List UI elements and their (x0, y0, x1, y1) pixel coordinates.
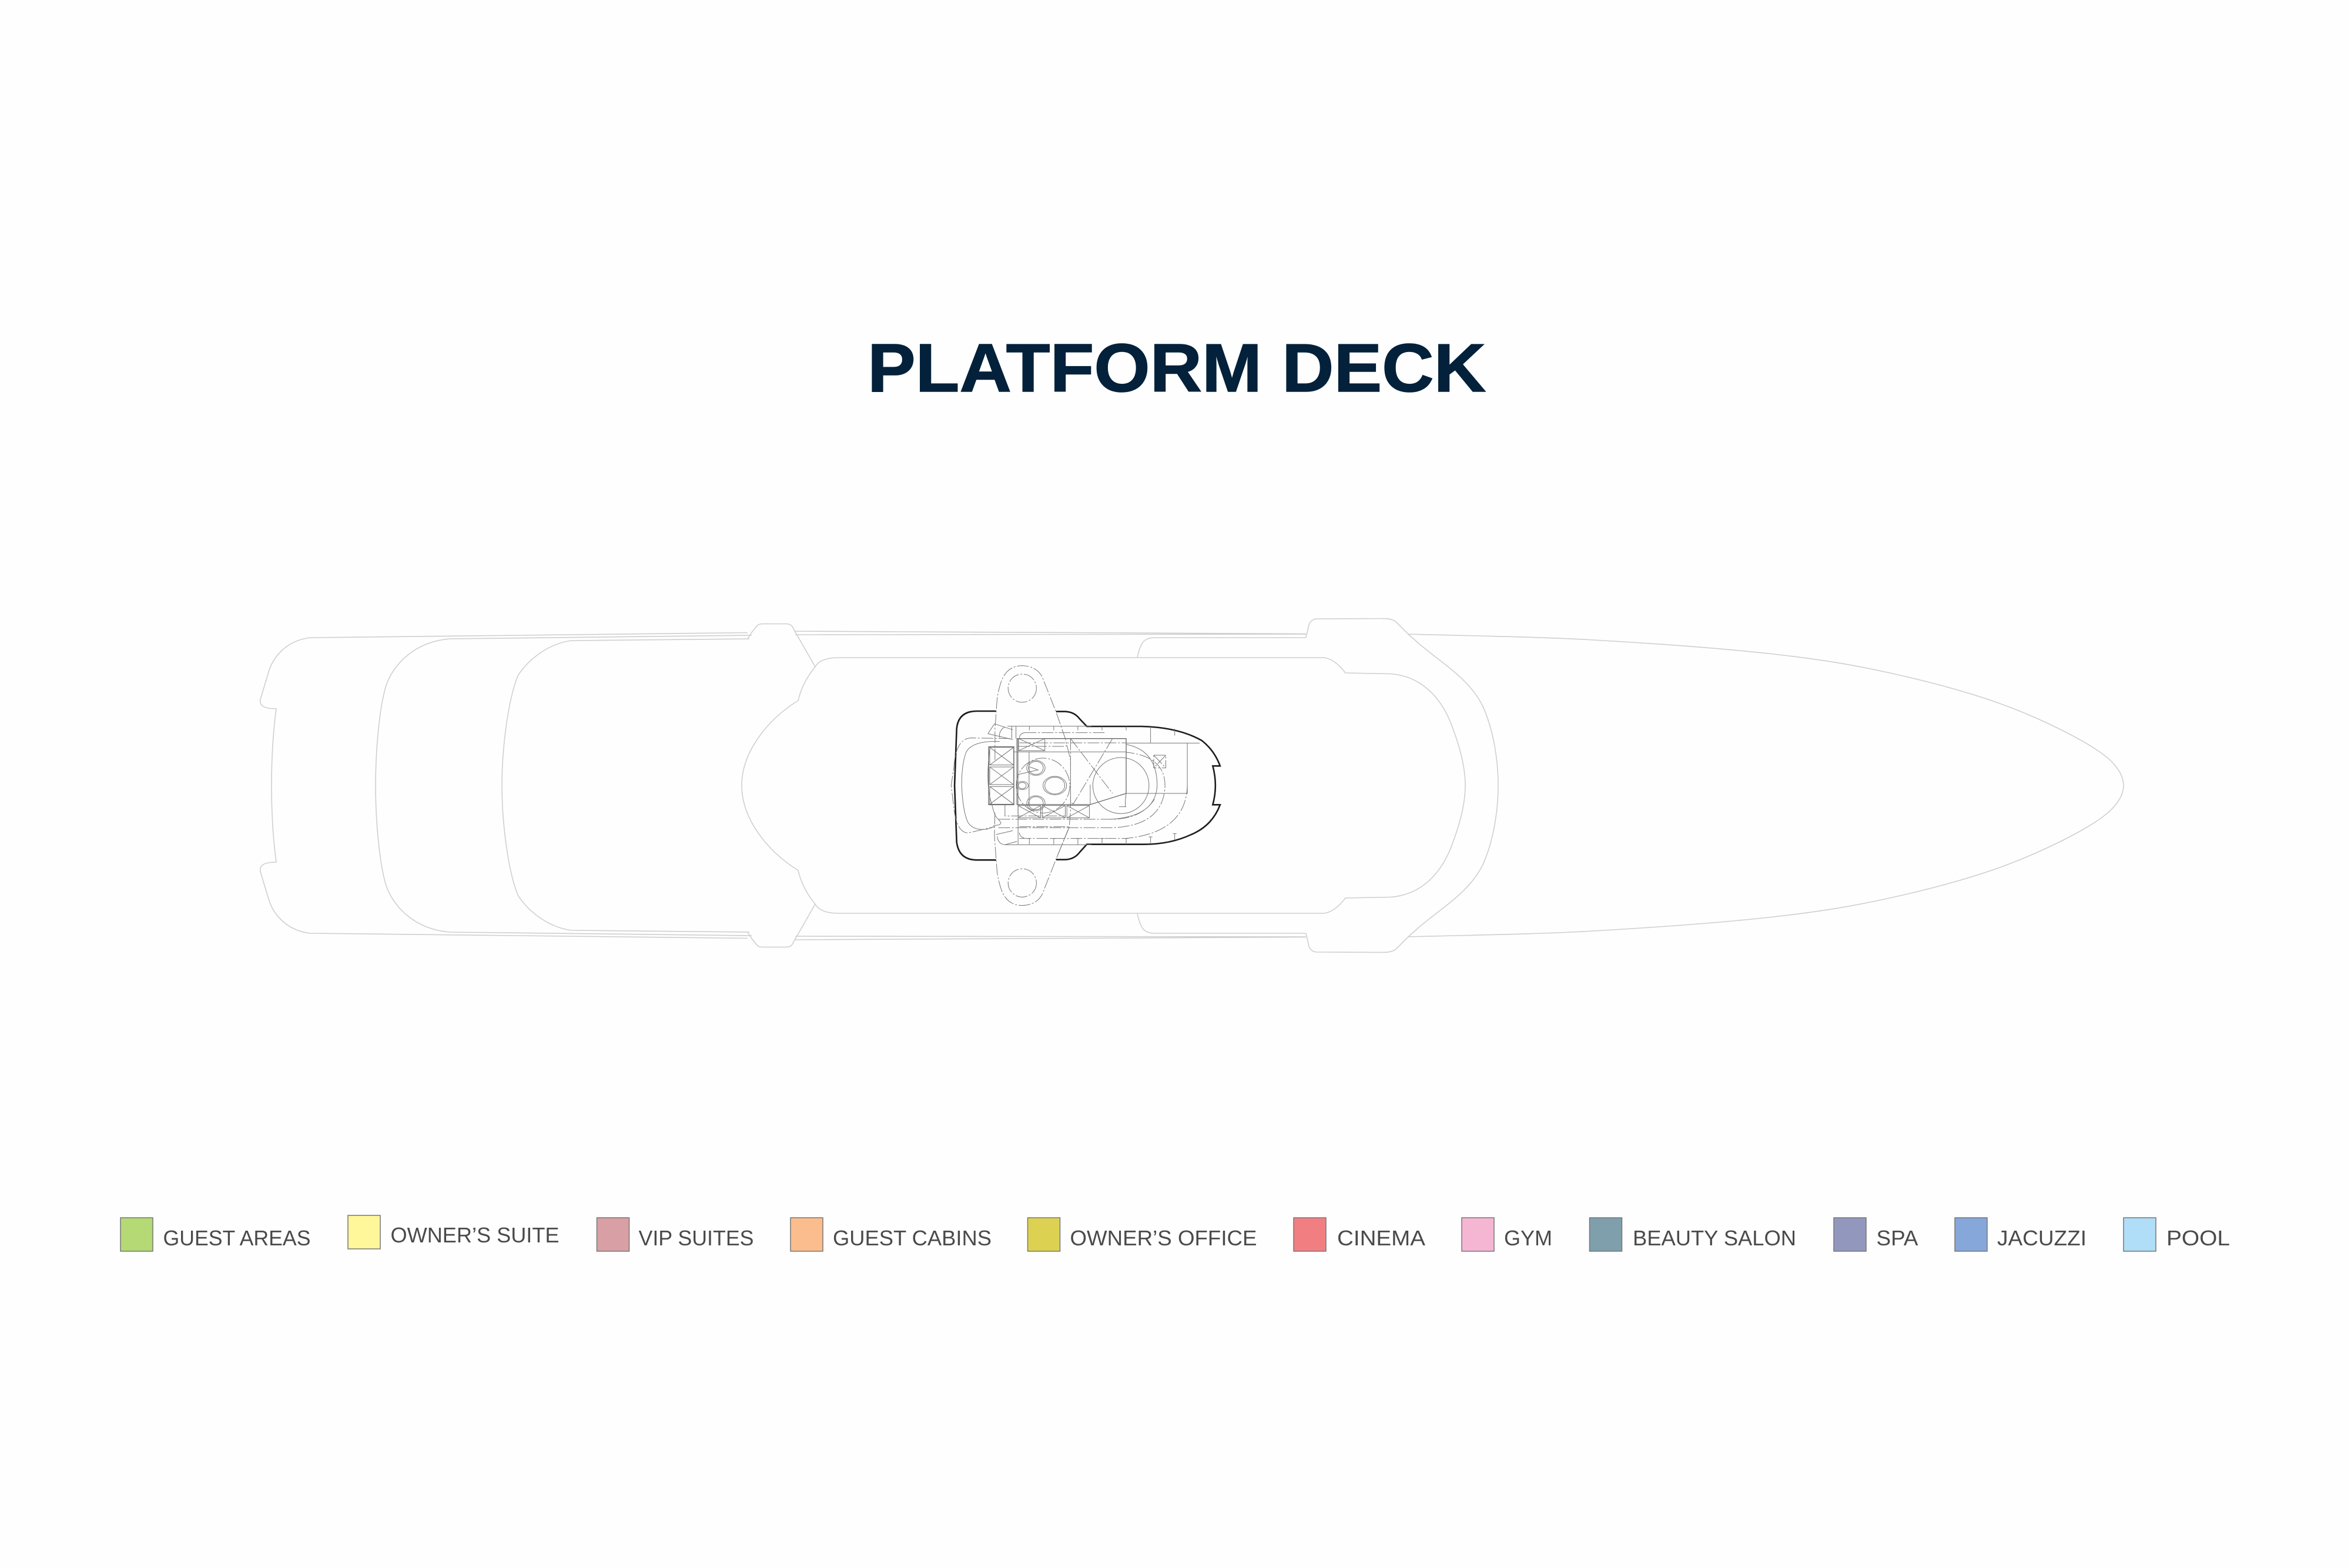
legend: beauty salon: BEAUTY SALON (1633, 1226, 1796, 1250)
legend: jacuzzi: JACUZZI (1997, 1226, 2087, 1250)
legend: gym (1462, 1218, 1552, 1251)
legend: vip suites (597, 1218, 753, 1251)
lower half of hull outline (260, 785, 2124, 953)
legend: guest cabins (791, 1218, 992, 1251)
garage structure (989, 726, 1187, 859)
round tanks (1016, 758, 1070, 813)
upper half of hull outline (260, 618, 2124, 785)
legend: owner's office: OWNER’S OFFICE (1070, 1226, 1257, 1250)
legend: vip suites: VIP SUITES (638, 1226, 753, 1250)
legend: owner's office (1027, 1218, 1257, 1251)
legend: jacuzzi (1955, 1218, 2087, 1251)
legend: spa (1834, 1218, 1918, 1251)
legend: guest areas (120, 1218, 310, 1251)
legend: owner's suite: OWNER’S SUITE (390, 1223, 560, 1247)
legend: pool (2124, 1218, 2230, 1251)
legend: pool: POOL (2166, 1226, 2230, 1250)
legend: guest areas: GUEST AREAS (163, 1226, 310, 1250)
legend: spa: SPA (1876, 1226, 1918, 1250)
deck outline (955, 711, 1220, 860)
legend: cinema (1294, 1218, 1425, 1251)
legend: beauty salon (1589, 1218, 1796, 1251)
stern curved lines (951, 724, 1017, 845)
legend: guest cabins: GUEST CABINS (833, 1226, 992, 1250)
legend: gym: GYM (1504, 1226, 1552, 1250)
cross-braced hatch boxes (990, 739, 1166, 818)
legend (120, 1215, 2230, 1251)
platform deck plan (951, 666, 1220, 906)
forward deck lines and ticks (1027, 726, 1200, 845)
legend: cinema: CINEMA (1337, 1226, 1425, 1250)
large diagonal brace and ellipse (1070, 739, 1157, 819)
legend: owner's suite (348, 1215, 560, 1249)
title: PLATFORM DECK (868, 330, 1486, 406)
yacht outline plan (260, 618, 2124, 953)
tender davit platforms (994, 666, 1070, 906)
